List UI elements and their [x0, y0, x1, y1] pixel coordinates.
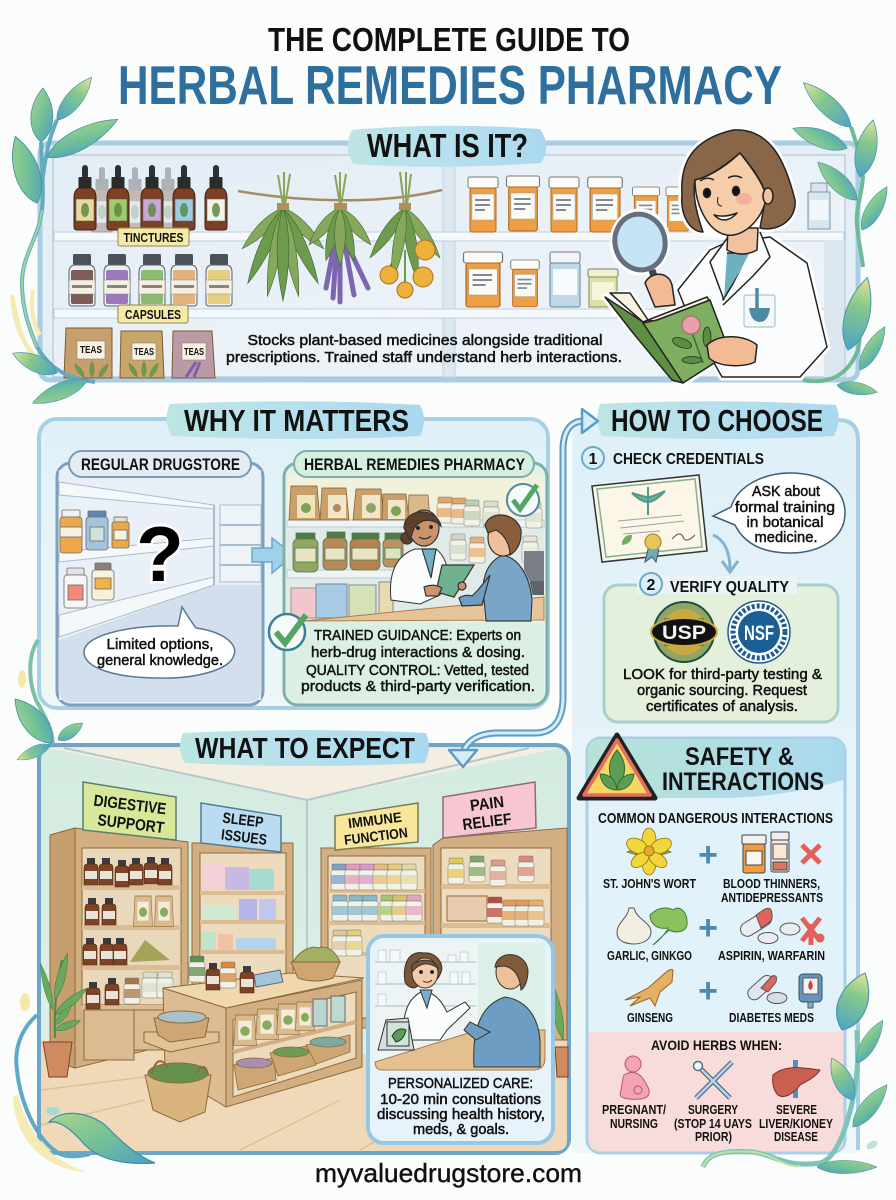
label: tinctures: TINCTURES: [124, 231, 184, 245]
consultation scene: [375, 942, 545, 1070]
interaction: garlic and ginkgo: +: [698, 909, 718, 947]
prescription bottles: [464, 176, 830, 307]
hanging herb bundles: [238, 172, 444, 302]
speech bubble: limited options: Limited options,: [106, 636, 214, 653]
center display table: [163, 956, 364, 1107]
interaction: st johns wort: BLOOD THINNERS,: [723, 876, 820, 891]
step 2 heading: VERIFY QUALITY: [670, 579, 789, 596]
heading: how to choose: HOW TO CHOOSE: [611, 403, 823, 438]
avoid: liver and kidney: [759, 1060, 833, 1144]
avoid: liver and kidney: DISEASE: [774, 1129, 818, 1144]
capsule jars: [69, 254, 232, 306]
speech bubble: limited options: general knowledge.: [97, 652, 223, 669]
interaction: st johns wort: ST. JOHN'S WORT: [603, 876, 696, 891]
avoid: pregnant: PREGNANT/: [602, 1102, 666, 1117]
avoid: surgery: (STOP 14 UAYS: [674, 1116, 752, 1131]
check icon: top: [507, 484, 539, 516]
verify text: certificates of analysis.: [646, 698, 798, 715]
speech bubble: ask about training: formal training: [735, 499, 835, 516]
interaction: garlic and ginkgo: [607, 908, 825, 963]
sign: immune function: IMMUNE: [347, 809, 403, 831]
monitor: [524, 551, 544, 595]
inset: personalized care: [368, 936, 553, 1143]
decorative vine: mid and lower left: [7, 640, 155, 1172]
panel: what to expect: [38, 730, 569, 1153]
icon: NSF seal: [728, 601, 790, 663]
subheading: avoid herbs when: AVOID HERBS WHEN:: [651, 1037, 782, 1053]
interaction: garlic and ginkgo: ASPIRIN, WARFARIN: [718, 948, 825, 963]
customer: [459, 515, 532, 621]
speech bubble: limited options: [84, 607, 235, 678]
sub-panel label: regular drugstore: REGULAR DRUGSTORE: [81, 455, 240, 474]
herbal shop shelves and products: [287, 486, 544, 618]
tea bags: TEAS: [134, 347, 154, 358]
sign: digestive support: [83, 782, 176, 840]
step 1 heading: 1: [589, 451, 598, 468]
icon: certificate: [592, 475, 707, 562]
step 1 heading: CHECK CREDENTIALS: [613, 451, 764, 468]
sign: sleep issues: ISSUES: [220, 826, 268, 849]
verify text: organic sourcing. Request: [637, 682, 808, 699]
sign: digestive support: SUPPORT: [97, 812, 165, 837]
question mark: ?: [136, 510, 184, 598]
arrow: regular to herbal: [252, 538, 294, 573]
care text: [377, 1076, 545, 1138]
description text: prescriptions. Trained staff understand herb interactions.: [226, 349, 622, 366]
herbal benefits box: QUALITY CONTROL: Vetted, tested: [306, 662, 529, 679]
step 1 heading: [582, 447, 764, 469]
potted plant: right: [545, 976, 568, 1077]
speech bubble: ask about training: medicine.: [754, 529, 818, 546]
herbal benefits box: TRAINED GUIDANCE: Experts on: [314, 627, 521, 644]
heading: what to expect: WHAT TO EXPECT: [195, 733, 415, 765]
decorative vine: top left: [4, 72, 122, 411]
herbal benefits box: [287, 622, 544, 702]
interaction: ginseng: +: [698, 972, 718, 1010]
baskets: [144, 947, 340, 1122]
herbal benefits box: products & third-party verification.: [301, 678, 535, 695]
care text: discussing health history,: [377, 1107, 545, 1123]
avoid: liver and kidney: SEVERE: [776, 1102, 817, 1117]
heading: why it matters: WHY IT MATTERS: [184, 403, 409, 438]
avoid: surgery: [674, 1062, 752, 1144]
pharmacist with clipboard: [390, 510, 474, 604]
label: tinctures: [118, 228, 189, 246]
icon: warning triangle: [579, 735, 655, 798]
shelf unit: immune: [321, 848, 431, 1028]
check icon: bottom: [269, 614, 306, 650]
sub-panel: herbal remedies pharmacy: [269, 451, 547, 705]
interaction: ginseng: GINSENG: [627, 1010, 673, 1025]
tea bags: TEAS: [80, 345, 102, 356]
speech bubble: ask about training: [713, 473, 845, 553]
sub-panel label: herbal remedies pharmacy: [294, 451, 534, 477]
label: capsules: [118, 305, 188, 323]
sign: pain relief: PAIN: [469, 794, 505, 815]
white halo: [605, 130, 827, 383]
shelf unit: pain: [433, 828, 567, 1040]
counter: [304, 597, 544, 621]
description text: Stocks plant-based medicines alongside traditional: [248, 332, 602, 349]
sparse bottles: [60, 510, 129, 608]
step 2 heading: [640, 573, 789, 596]
care text: meds, & goals.: [413, 1122, 509, 1138]
panel: what is it: [4, 72, 894, 411]
heading: safety and interactions: SAFETY &: [685, 743, 794, 771]
shelf unit: digestive: [50, 828, 188, 1068]
sign: pain relief: [443, 782, 536, 838]
panel: safety and interactions: [579, 735, 845, 1153]
decorative vine: bottom right: [703, 968, 893, 1174]
sign: sleep issues: SLEEP: [222, 810, 264, 831]
flow arrow: how to choose to what to expect: [449, 409, 598, 767]
sign: pain relief: RELIEF: [462, 811, 513, 834]
interaction: st johns wort: ANTIDEPRESSANTS: [721, 890, 823, 905]
icon: USP seal: USP: [662, 623, 706, 644]
tea bags: TEAS: [184, 347, 204, 358]
room ceiling and floor: [41, 748, 567, 1151]
tea bags: [64, 328, 215, 378]
panel: how to choose: [572, 401, 858, 1153]
heading: what is it: WHAT IS IT?: [367, 127, 528, 164]
avoid: surgery: SURGERY: [688, 1102, 738, 1117]
heading: safety and interactions: [662, 743, 824, 796]
speech bubble: ask about training: ASK about: [752, 483, 821, 500]
avoid: pregnant: [602, 1056, 666, 1131]
interaction: ginseng: [625, 970, 822, 1025]
avoid: surgery: PRIOR): [695, 1129, 732, 1144]
title: THE COMPLETE GUIDE TO: [268, 21, 630, 58]
potted plant: left: [38, 953, 89, 1077]
subheading: common dangerous interactions: COMMON DANGEROUS INTERACTIONS: [598, 810, 833, 827]
care text: PERSONALIZED CARE:: [388, 1076, 533, 1092]
panel: verify quality: [604, 573, 838, 722]
sub-panel label: regular drugstore: [69, 451, 251, 477]
sub-panel: regular drugstore: [57, 451, 263, 705]
title: [118, 21, 782, 116]
heading: safety and interactions: INTERACTIONS: [662, 768, 824, 796]
arrow: step 1 to step 2: [713, 535, 738, 572]
decorative vine: top right: [790, 76, 894, 398]
interaction: garlic and ginkgo: GARLIC, GINKGO: [607, 948, 692, 963]
description text: [226, 332, 622, 366]
sign: immune function: [335, 803, 418, 850]
sub-panel label: herbal remedies pharmacy: HERBAL REMEDIES PHARMACY: [304, 455, 526, 474]
sign: sleep issues: [201, 803, 281, 852]
pharmacist with magnifier and book: [605, 130, 827, 383]
interaction: st johns wort: +: [698, 836, 718, 874]
verify text: LOOK for third-party testing &: [623, 666, 822, 683]
icon: NSF seal: NSF: [744, 622, 774, 645]
herbal benefits box: herb-drug interactions & dosing.: [311, 644, 525, 661]
icon: USP seal: [651, 602, 717, 662]
care text: 10-20 min consultations: [380, 1092, 541, 1108]
verify text: [623, 666, 822, 715]
step 2 heading: 2: [647, 577, 656, 594]
footer url: myvaluedrugstore.com: [315, 1158, 582, 1188]
avoid: pregnant: NURSING: [610, 1116, 658, 1131]
shelf unit: sleep: [192, 843, 293, 1003]
tincture bottles: [74, 165, 227, 232]
interaction: ginseng: DIABETES MEDS: [729, 1010, 814, 1025]
speech bubble: ask about training: in botanical: [746, 514, 824, 531]
sign: immune function: FUNCTION: [343, 824, 409, 848]
label: capsules: CAPSULES: [125, 308, 181, 322]
interaction: st johns wort: [603, 828, 823, 905]
avoid: liver and kidney: LIVER/KIONEY: [759, 1116, 833, 1131]
sign: digestive support: DIGESTIVE: [93, 793, 167, 818]
panel: why it matters: [39, 401, 548, 708]
